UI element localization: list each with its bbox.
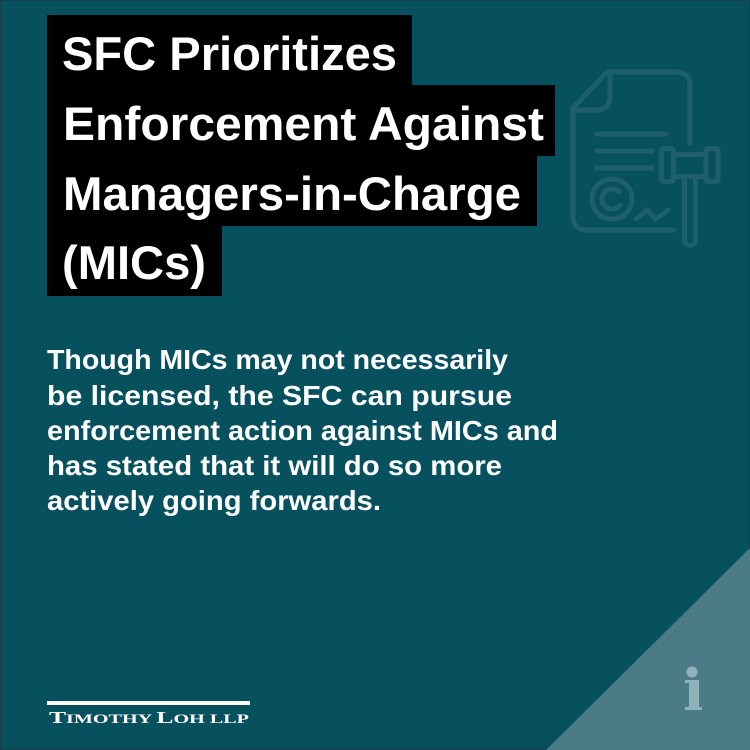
body text: Though MICs may not necessarily xyxy=(47,344,508,375)
body text xyxy=(47,344,558,516)
body text: be licensed, the SFC can pursue xyxy=(47,380,512,411)
icon: info i xyxy=(685,666,702,710)
title highlight blocks xyxy=(47,15,555,296)
title text xyxy=(62,27,544,289)
title text: (MICs) xyxy=(62,236,206,289)
corner info triangle xyxy=(546,548,750,750)
title text: SFC Prioritizes xyxy=(62,27,397,80)
logo: Timothy Loh LLP: T IMOTHY L OH LLP xyxy=(49,708,249,727)
icon: document with gavel xyxy=(573,72,718,246)
title text: Managers-in-Charge xyxy=(63,167,521,220)
logo: Timothy Loh LLP xyxy=(47,701,250,727)
body text: enforcement action against MICs and xyxy=(47,415,558,446)
body text: actively going forwards. xyxy=(47,485,381,516)
title xyxy=(47,15,555,296)
title text: Enforcement Against xyxy=(63,97,544,150)
body text: has stated that it will do so more xyxy=(47,450,502,481)
